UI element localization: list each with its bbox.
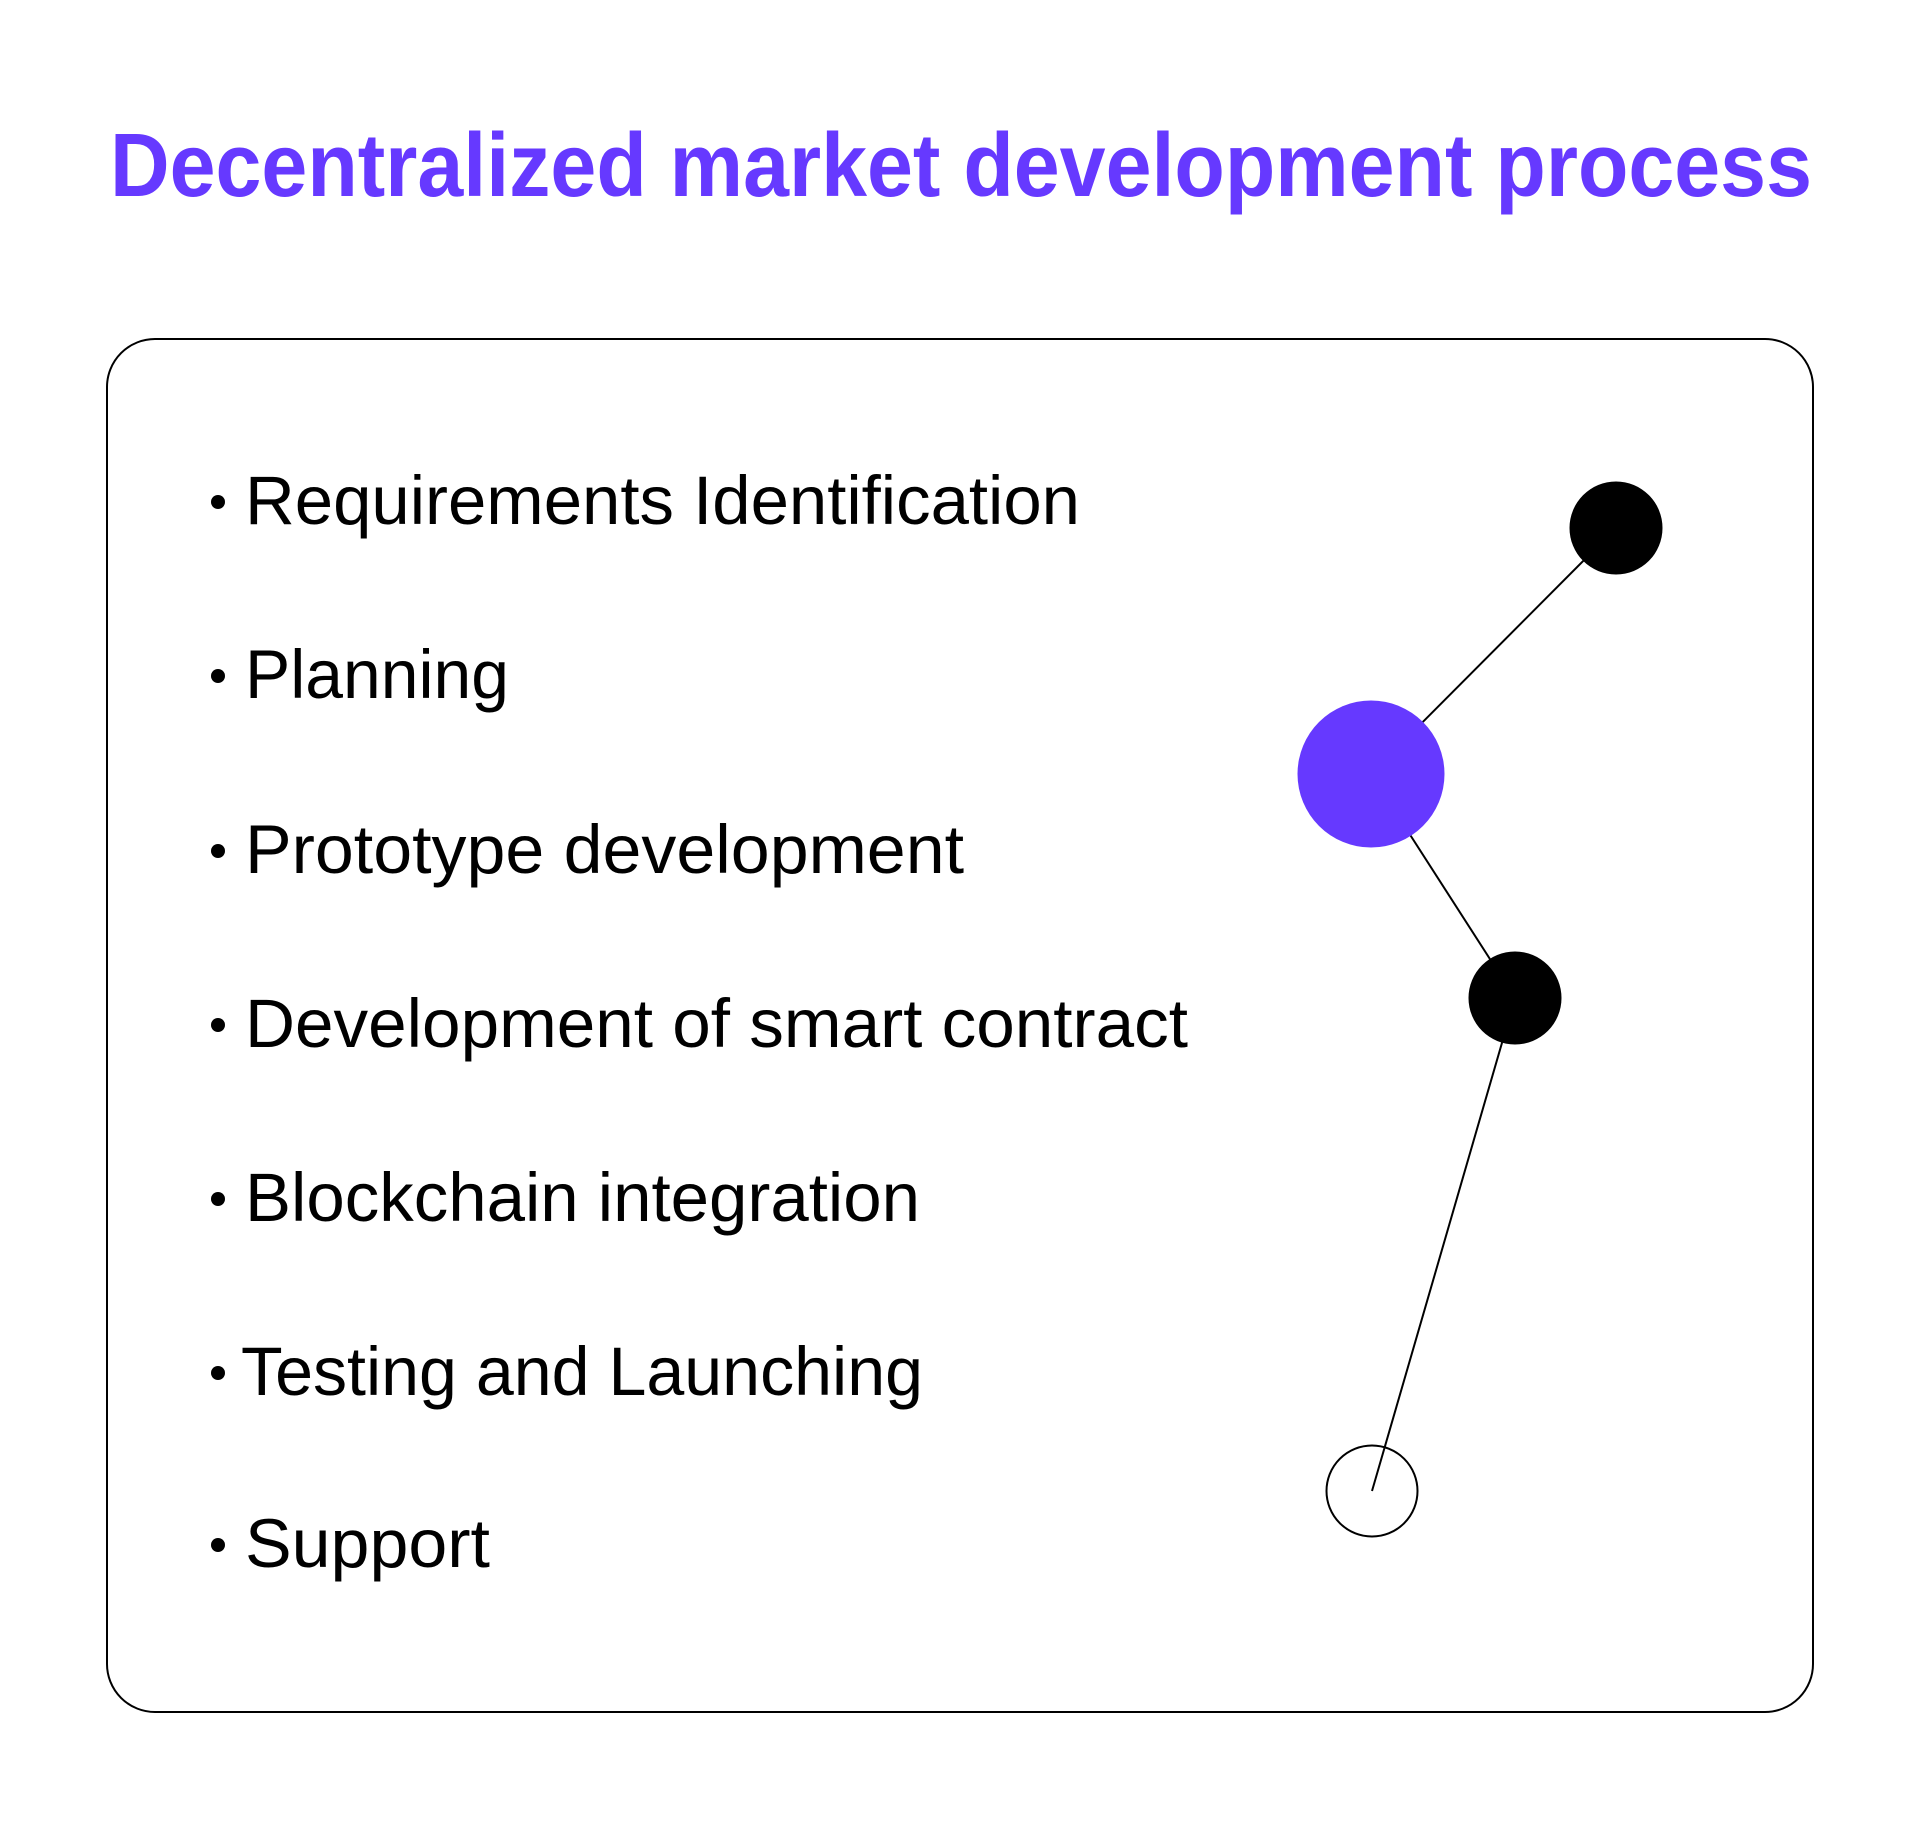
panel: process box bbox=[107, 339, 1813, 1712]
step 7: Support bbox=[245, 1505, 490, 1582]
chart: node path bbox=[1298, 482, 1662, 1536]
step 6: Testing and Launching bbox=[241, 1333, 923, 1410]
step 5: Blockchain integration bbox=[245, 1159, 920, 1236]
list: process steps bbox=[211, 462, 1188, 1582]
step 2: Planning bbox=[245, 636, 509, 713]
step 4: Development of smart contract bbox=[245, 985, 1188, 1062]
step 1: Requirements Identification bbox=[245, 462, 1080, 539]
title: Decentralized market development process bbox=[110, 116, 1812, 216]
step 3: Prototype development bbox=[245, 811, 964, 888]
